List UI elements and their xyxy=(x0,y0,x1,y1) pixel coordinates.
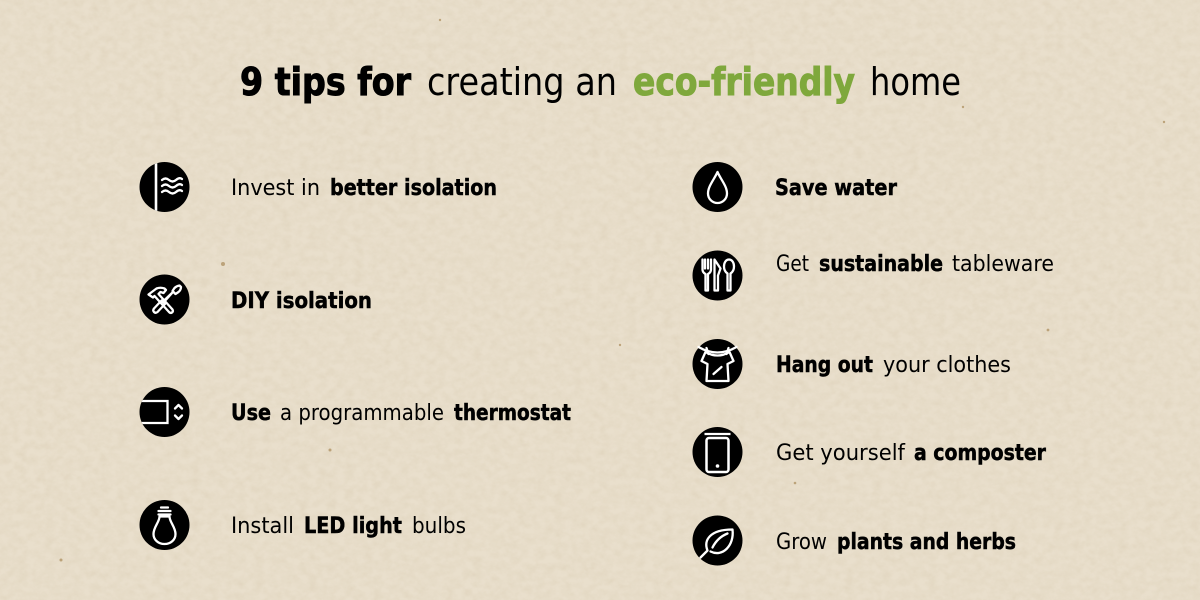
icon: light bulb xyxy=(140,500,190,550)
text: tableware: sustainable xyxy=(819,251,943,277)
text: composter: Get yourself xyxy=(776,440,906,466)
title: creating an xyxy=(427,60,617,104)
text: tableware: Get xyxy=(776,251,809,277)
text: composter: a composter xyxy=(914,440,1047,466)
text: tableware xyxy=(776,251,1054,277)
icon: hammer and screwdriver xyxy=(140,274,190,324)
text: hang out clothes: Hang out xyxy=(776,352,873,378)
icon: thermostat xyxy=(138,387,190,437)
title: home xyxy=(870,60,961,104)
text: LED bulbs xyxy=(231,513,466,539)
icon: composter bin xyxy=(692,427,742,477)
icon: insulation xyxy=(140,162,190,212)
icon: shirt on line xyxy=(692,339,742,389)
tip: DIY isolation xyxy=(140,274,372,324)
icon: leaf xyxy=(692,516,742,566)
tip: LED bulbs xyxy=(140,500,466,550)
text: hang out clothes: your clothes xyxy=(883,352,1011,378)
tip: save water xyxy=(692,162,898,212)
title xyxy=(240,60,961,104)
tip: tableware xyxy=(692,250,1054,300)
text: thermostat: a programmable xyxy=(280,400,444,426)
text: save water: Save water xyxy=(775,175,898,201)
text: thermostat: Use xyxy=(231,400,271,426)
text: DIY isolation: DIY isolation xyxy=(231,288,372,314)
text: better isolation: Invest in xyxy=(231,175,320,201)
tip: plants and herbs xyxy=(692,516,1016,566)
text: LED bulbs: bulbs xyxy=(412,513,466,539)
tip: thermostat xyxy=(138,387,571,437)
tip: hang out clothes xyxy=(692,339,1011,389)
icon: water drop xyxy=(692,162,742,212)
text: hang out clothes xyxy=(776,352,1011,378)
title: eco-friendly xyxy=(633,60,855,104)
text: thermostat xyxy=(231,400,571,426)
text: composter xyxy=(776,440,1047,466)
text: plants and herbs: Grow xyxy=(776,529,827,555)
text: thermostat: thermostat xyxy=(454,400,571,426)
text: better isolation xyxy=(231,175,497,201)
text: plants and herbs: plants and herbs xyxy=(837,529,1016,555)
text: plants and herbs xyxy=(776,529,1016,555)
text: better isolation: better isolation xyxy=(330,175,497,201)
icon: fork, knife, spoon xyxy=(692,250,742,300)
tip: better isolation xyxy=(140,162,497,212)
text: LED bulbs: Install xyxy=(231,513,294,539)
tip: composter xyxy=(692,427,1047,477)
title: 9 tips for xyxy=(240,60,411,104)
text: tableware: tableware xyxy=(952,251,1054,277)
text: LED bulbs: LED light xyxy=(304,513,402,539)
